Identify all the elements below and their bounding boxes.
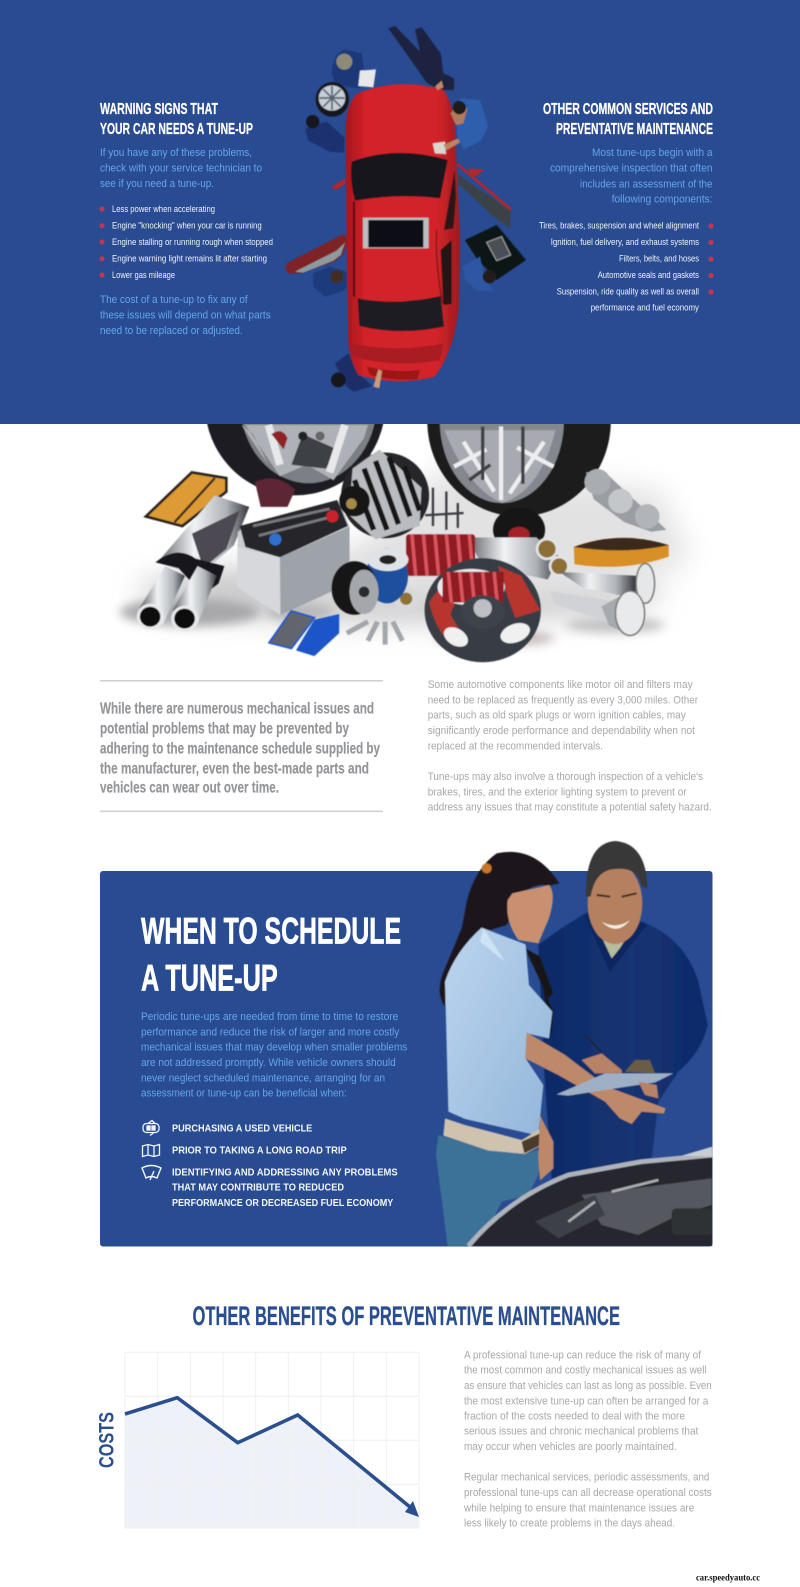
line: cost trend — [125, 1398, 410, 1507]
panel: when to schedule a tune-up — [100, 841, 712, 1246]
list: inspected components: Suspension, ride quality as well as overall — [557, 286, 699, 296]
list item: identifying problems: IDENTIFYING AND ADDRESSING ANY PROBLEMS — [172, 1167, 398, 1178]
heading: warning signs: YOUR CAR NEEDS A TUNE-UP — [100, 121, 253, 138]
text: pull quote with rules: vehicles can wear out over time. — [100, 779, 279, 796]
list: warning signs: Engine warning light remains lit after starting — [112, 254, 267, 264]
icon: car with arrows — [143, 1120, 159, 1136]
oil filters — [394, 586, 413, 606]
valves — [425, 488, 464, 530]
text: component replacement details: need to be replaced as frequently as every 3,000 miles. Other — [428, 694, 698, 706]
list item: identifying problems — [142, 1166, 398, 1209]
text: warning signs intro: see if you need a tune-up. — [100, 178, 214, 190]
text: inspection intro — [550, 147, 713, 206]
list: warning signs: Lower gas mileage — [112, 270, 175, 280]
text: component replacement details: brakes, tires, and the exterior lighting system to prevent or — [428, 786, 687, 798]
text: benefits description: A professional tune-up can reduce the risk of many of — [464, 1349, 702, 1361]
list: inspected components — [539, 221, 714, 312]
text: benefits description: the most common and costly mechanical issues as well — [464, 1365, 707, 1377]
list: warning signs — [99, 204, 273, 280]
text: inspection intro: following components: — [612, 194, 712, 206]
text: benefits description: professional tune-ups can all decrease operational costs — [464, 1487, 712, 1499]
air filter — [146, 472, 226, 526]
text: component replacement details: parts, such as old spark plugs or worn ignition cables, may — [428, 710, 686, 722]
text: pull quote with rules: the manufacturer, even the best-made parts and — [100, 760, 369, 777]
small wheel — [492, 514, 546, 541]
text: pull quote with rules: While there are numerous mechanical issues and — [100, 700, 374, 717]
list item: purchasing a used vehicle: PURCHASING A USED VEHICLE — [172, 1124, 313, 1135]
right wheel — [427, 325, 611, 516]
list: inspected components: Tires, brakes, suspension and wheel alignment — [539, 221, 699, 231]
brake pads — [269, 611, 314, 648]
text: tune-up description: Periodic tune-ups are needed from time to time to restore — [141, 1011, 398, 1023]
heading: when to schedule — [141, 909, 401, 999]
text: tune-up description: performance and reduce the risk of larger and more costly — [141, 1026, 400, 1038]
text: component replacement details — [428, 679, 712, 814]
pistons — [559, 572, 636, 599]
text: benefits description: less likely to create problems in the days ahead. — [464, 1518, 675, 1530]
shock absorber — [467, 537, 559, 580]
steering wheel — [425, 558, 541, 662]
list: inspected components: Filters, belts, and hoses — [619, 253, 699, 263]
list item: purchasing a used vehicle — [143, 1120, 313, 1136]
text: warning signs intro: If you have any of these problems, — [100, 147, 252, 159]
text: benefits description: as ensure that vehicles can last as long as possible. Even — [464, 1380, 712, 1392]
text: tune-up description: are not addressed promptly. While vehicle owners should — [141, 1057, 396, 1069]
text: tune-up description — [141, 1011, 408, 1100]
list: inspected components: performance and fuel economy — [591, 302, 699, 312]
text: component replacement details: address any issues that may constitute a potential safety hazard. — [428, 802, 712, 814]
list item: prior to a road trip: PRIOR TO TAKING A LONG ROAD TRIP — [172, 1145, 347, 1156]
illustration: auto parts collection — [116, 424, 690, 664]
text: inspection intro: includes an assessment of the — [580, 178, 712, 190]
icon: windshield wiper — [142, 1166, 161, 1180]
text: component replacement details: Tune-ups may also involve a thorough inspection of a vehicle's — [428, 771, 703, 783]
text: benefits description: serious issues and chronic mechanical problems that — [464, 1426, 699, 1438]
arrow head — [405, 1501, 419, 1517]
text: benefits description: the most extensive tune-up can often be arranged for a — [464, 1395, 709, 1407]
axis label: COSTS — [96, 1412, 118, 1468]
photo: customer and mechanic at car — [436, 841, 712, 1246]
round air filter — [574, 538, 669, 567]
text: component replacement details: Some automotive components like motor oil and filters may — [428, 679, 693, 691]
alternator — [341, 453, 429, 538]
text: component replacement details: significantly erode performance and dependability when not — [428, 725, 696, 737]
text: pull quote with rules: adhering to the maintenance schedule supplied by — [100, 740, 380, 757]
text: benefits description: Regular mechanical services, periodic assessments, and — [464, 1472, 709, 1484]
list: inspected components: Ignition, fuel delivery, and exhaust systems — [551, 237, 699, 247]
list: warning signs: Engine "knocking" when your car is running — [112, 221, 262, 231]
list item: identifying problems: PERFORMANCE OR DECREASED FUEL ECONOMY — [172, 1198, 394, 1209]
heading: other common services — [543, 101, 713, 138]
icon: folded map — [142, 1144, 160, 1156]
text: component replacement details: replaced at the recommended intervals. — [428, 740, 603, 752]
text: warning signs intro: check with your service technician to — [100, 163, 262, 175]
text: benefits description: fraction of the costs needed to deal with the more — [464, 1410, 685, 1422]
text: pull quote with rules — [100, 680, 383, 812]
text: benefits description: while helping to ensure that maintenance issues are — [463, 1502, 694, 1514]
text: inspection intro: Most tune-ups begin with a — [592, 147, 713, 159]
text: pull quote with rules: potential problems that may be prevented by — [100, 720, 349, 737]
chart: declining costs over time — [96, 1352, 419, 1528]
heading: warning signs — [100, 101, 253, 138]
text: cost of a tune-up: The cost of a tune-up to fix any of — [100, 294, 248, 306]
list: inspected components: Automotive seals and gaskets — [598, 270, 699, 280]
text: tune-up description: assessment or tune-up can be beneficial when: — [141, 1088, 347, 1100]
heading: other common services: PREVENTATIVE MAINTENANCE — [556, 121, 713, 138]
heading: when to schedule: A TUNE-UP — [141, 957, 278, 999]
list: warning signs: Engine stalling or running rough when stopped — [112, 237, 273, 247]
heading: when to schedule: WHEN TO SCHEDULE — [141, 909, 401, 951]
heading: other common services: OTHER COMMON SERVICES AND — [543, 101, 713, 118]
list: warning signs: Less power when accelerating — [112, 204, 215, 214]
watermark: car.speedyauto.cc — [696, 1574, 760, 1584]
battery — [237, 500, 350, 556]
text: warning signs intro — [100, 147, 262, 190]
text: cost of a tune-up: these issues will depend on what parts — [100, 310, 271, 322]
heading: warning signs: WARNING SIGNS THAT — [100, 101, 218, 118]
text: benefits description — [463, 1349, 712, 1530]
text: tune-up description: never neglect scheduled maintenance, arranging for an — [141, 1072, 385, 1084]
panel: hero blue band — [0, 0, 800, 424]
text: benefits description: may occur when vehicles are poorly maintained. — [464, 1441, 677, 1453]
text: inspection intro: comprehensive inspection that often — [550, 163, 712, 175]
camshaft — [586, 472, 666, 532]
list item: identifying problems: THAT MAY CONTRIBUTE TO REDUCED — [172, 1183, 344, 1194]
spark plugs — [347, 622, 402, 645]
left wheel — [206, 424, 384, 496]
text: tune-up description: mechanical issues that may develop when smaller problems — [141, 1042, 408, 1054]
illustration: red car with mechanics from above — [285, 26, 526, 392]
text: cost of a tune-up: need to be replaced or adjusted. — [100, 325, 243, 337]
air intake — [255, 479, 295, 507]
text: cost of a tune-up — [100, 294, 271, 337]
exhaust — [157, 495, 249, 576]
